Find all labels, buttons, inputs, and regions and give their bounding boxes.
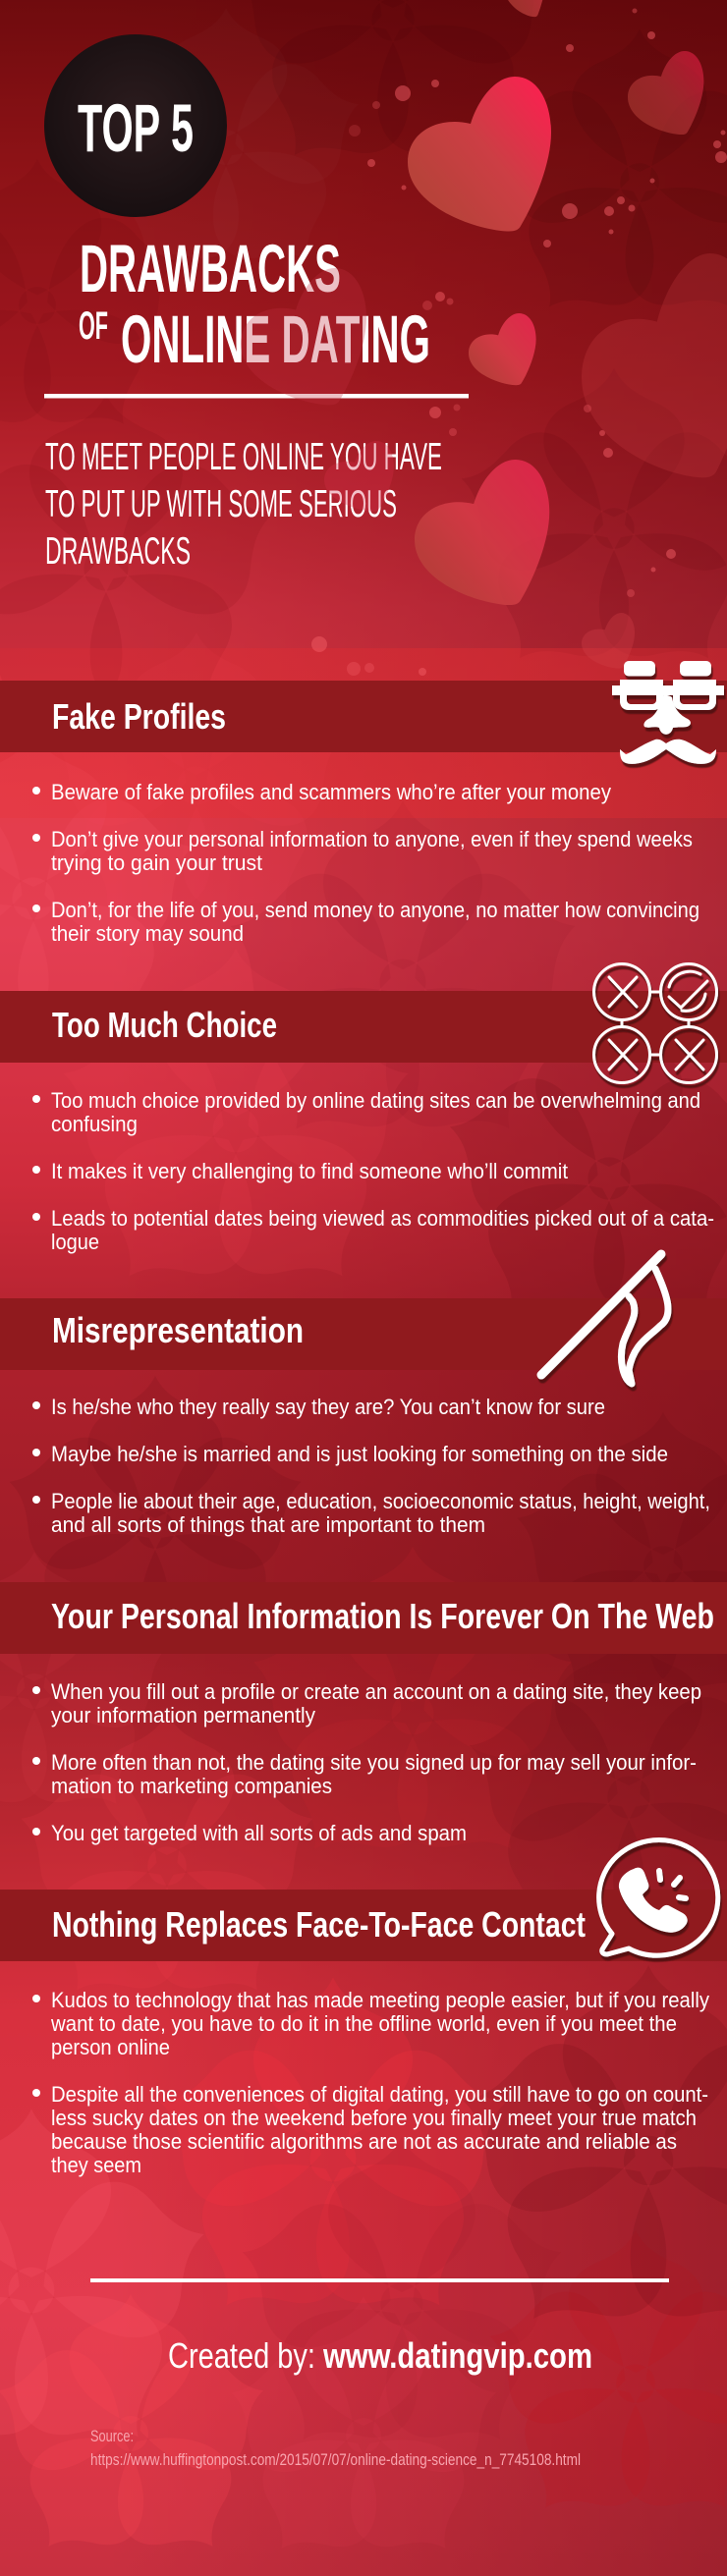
icon: flag bbox=[541, 1254, 668, 1384]
bullet list bbox=[32, 1088, 714, 1254]
bullet list bbox=[32, 780, 699, 946]
bullet list: your information permanently bbox=[51, 1703, 315, 1727]
heading bar bbox=[0, 1890, 727, 1961]
title bbox=[79, 231, 430, 377]
bullet list bbox=[32, 1679, 701, 1845]
title: ONLINE DATING bbox=[121, 301, 430, 377]
subtitle bbox=[45, 436, 442, 573]
title: OF bbox=[79, 304, 108, 348]
background hearts and bokeh bbox=[311, 0, 727, 676]
title: DRAWBACKS bbox=[80, 231, 341, 306]
badge: TOP 5 bbox=[44, 34, 227, 217]
bullet list: Maybe he/she is married and is just looking for something on the side bbox=[51, 1442, 668, 1466]
bullet list: Is he/she who they really say they are? You can’t know for sure bbox=[51, 1395, 605, 1419]
icon: phone speech bubble bbox=[599, 1840, 718, 1955]
credit: Created by: bbox=[168, 2335, 315, 2376]
heading: Fake Profiles bbox=[52, 696, 226, 737]
bullet list: and all sorts of things that are important to them bbox=[51, 1512, 485, 1537]
bullet list: person online bbox=[51, 2035, 170, 2059]
bullet list: want to date, you have to do it in the offline world, even if you meet the bbox=[50, 2011, 677, 2036]
bullet list: their story may sound bbox=[51, 921, 244, 946]
panel: Misrepresentation bbox=[0, 1254, 727, 1537]
bullet list bbox=[32, 1395, 710, 1537]
panel: Face-To-Face Contact bbox=[0, 1840, 727, 2177]
bullet list: less sucky dates on the weekend before you finally meet your true match bbox=[51, 2106, 697, 2130]
heading: Too Much Choice bbox=[52, 1005, 277, 1045]
panel: Fake Profiles bbox=[0, 661, 727, 946]
bullet list bbox=[32, 1988, 709, 2177]
heading: Misrepresentation bbox=[52, 1310, 304, 1350]
bullet list: mation to marketing companies bbox=[51, 1774, 332, 1798]
bullet list: trying to gain your trust bbox=[51, 850, 262, 875]
bullet list: You get targeted with all sorts of ads and spam bbox=[51, 1821, 467, 1845]
heading bar bbox=[0, 1582, 727, 1654]
credit bbox=[168, 2335, 592, 2376]
source: Source: bbox=[90, 2427, 134, 2445]
translucent hearts over the title text bbox=[241, 268, 394, 512]
badge: TOP 5: TOP 5 bbox=[78, 90, 194, 166]
icon: four choice circles bbox=[593, 964, 717, 1082]
credit: www.datingvip.com bbox=[322, 2335, 592, 2376]
bullet list: Beware of fake profiles and scammers who’re after your money bbox=[51, 780, 611, 804]
source: https://www.huffingtonpost.com/2015/07/07/online-dating-science_n_7745108.html bbox=[90, 2450, 581, 2469]
panel: Too Much Choice bbox=[0, 964, 727, 1254]
bullet list: More often than not, the dating site you signed up for may sell your infor- bbox=[51, 1750, 697, 1775]
subtitle: DRAWBACKS bbox=[45, 530, 191, 573]
light band behind Fake Profiles bbox=[0, 648, 727, 818]
bullet list: logue bbox=[51, 1230, 99, 1254]
subtitle: TO MEET PEOPLE ONLINE YOU HAVE bbox=[45, 436, 442, 478]
heading bar bbox=[0, 681, 727, 752]
subtitle: TO PUT UP WITH SOME SERIOUS bbox=[45, 483, 397, 525]
icon: disguise glasses and moustache bbox=[612, 661, 724, 764]
heading bar bbox=[0, 991, 727, 1063]
heading bar bbox=[0, 1298, 727, 1370]
source bbox=[90, 2427, 581, 2469]
bullet list: because those scientific algorithms are not as accurate and reliable as bbox=[51, 2129, 677, 2154]
bullet list: It makes it very challenging to find someone who’ll commit bbox=[51, 1159, 568, 1183]
heading: Nothing Replaces Face-To-Face Contact bbox=[52, 1904, 586, 1945]
panel: Personal Information bbox=[0, 1582, 727, 1845]
bullet list: confusing bbox=[51, 1112, 138, 1136]
bullet list: they seem bbox=[51, 2153, 141, 2177]
